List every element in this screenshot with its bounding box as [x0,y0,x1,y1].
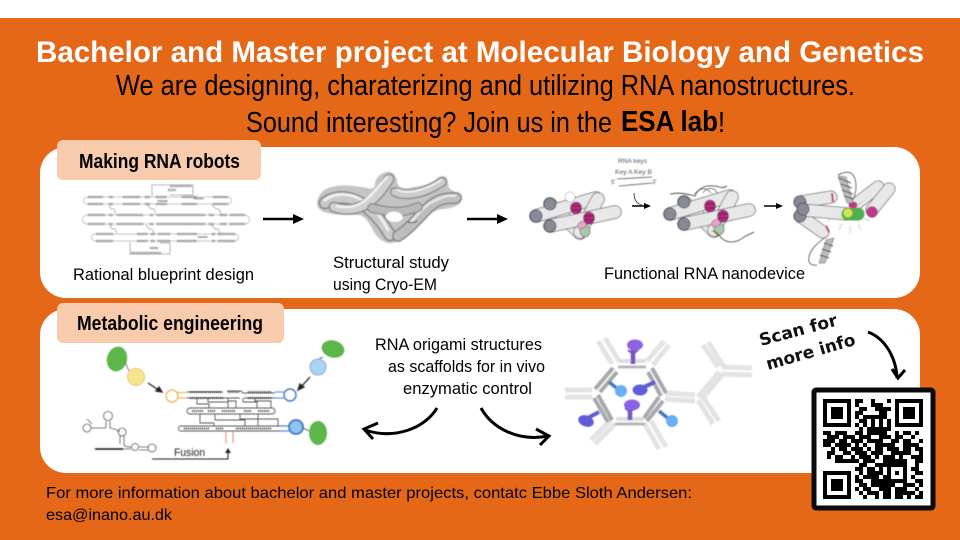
caption: structural study: using Cryo-EM [333,275,437,294]
caption: structural study [333,253,449,294]
QR code [814,390,933,508]
enzymes [577,340,678,429]
enzyme: green and yellow [104,344,144,386]
scan label [757,311,858,375]
description text: RNA origami structures [375,335,542,354]
arrow: key binding [632,193,651,209]
blueprint diagram [82,185,250,254]
footer contact text [46,485,692,524]
small RNA aptamer [83,412,156,452]
light outer arms [565,338,752,449]
description text [375,335,545,398]
heading tab: making RNA robots [57,140,261,180]
heading tab: metabolic engineering [57,303,284,343]
nanodevice: keys bound [664,186,754,242]
caption: nanodevice: Functional RNA nanodevice [604,264,805,283]
cryo-EM structure [317,172,461,243]
footer contact text: esa@inano.au.dk [46,507,173,524]
curved arrow: to enzyme assembly [481,408,549,445]
heading tab: metabolic engineering: Metabolic engineering [77,313,263,335]
panel: making RNA robots [40,140,920,298]
RNA origami strands [166,389,309,443]
call to action: ! [718,107,725,139]
enzyme: green and blue [310,338,346,375]
hexagon edges [594,361,666,424]
scan label: more info [764,330,858,375]
panel: metabolic engineering [40,303,920,473]
RNA keys label [611,159,656,186]
RNA scaffold diagram [83,338,346,459]
arrow [263,214,304,224]
description text: enzymatic control [403,379,532,398]
RNA keys label: RNA keys [618,159,647,165]
description text: as scaffolds for in vivo [388,357,545,376]
fusion label and arrow: Fusion [174,447,205,459]
arrow [148,383,162,392]
arrow [467,214,508,224]
footer contact text: For more information about bachelor and master projects, contatc Ebbe Sloth Andersen: [46,485,692,502]
fusion label and arrow [152,447,231,459]
nanodevice: closed state [530,192,615,237]
title: Bachelor and Master project at Molecular Biology and Genetics [36,36,924,69]
arrow [764,203,783,209]
call to action: ESA lab [621,106,718,138]
RNA keys label: Key A Key B [615,170,652,176]
nanodevice: open active state [794,172,889,265]
subtitle: We are designing, charaterizing and utilizing RNA nanostructures. [116,70,855,102]
curved arrow: to scaffold diagram [364,408,437,439]
caption: structural study: Structural study [333,253,449,272]
heading tab: making RNA robots: Making RNA robots [79,151,240,173]
call to action: Sound interesting? Join us in the [246,107,612,139]
RNA keys label: 3' [652,180,656,186]
arrow: to QR code [868,332,905,378]
RNA keys label: 5' [611,180,615,186]
arrow [298,377,310,390]
hexagonal scaffold with enzymes [565,338,752,449]
caption: blueprint: Rational blueprint design [73,265,254,284]
scan label: Scan for [757,311,840,351]
